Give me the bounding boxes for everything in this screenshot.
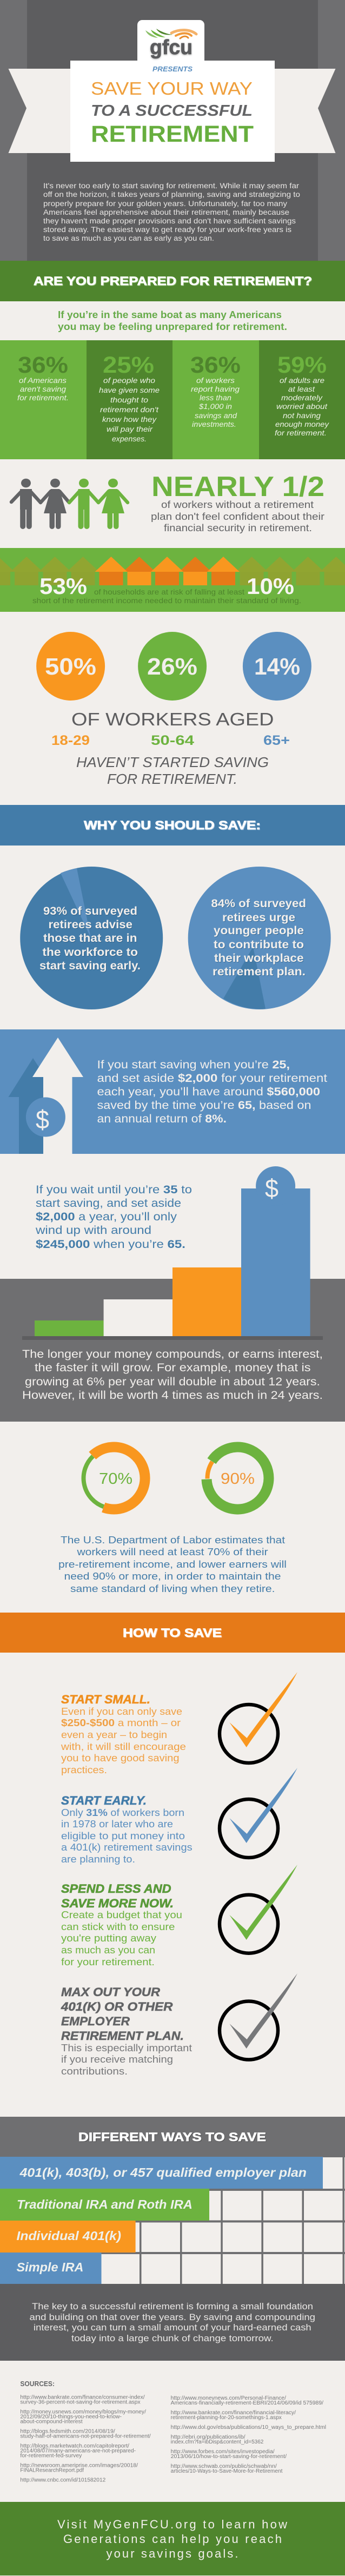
sources left column: http://money.usnews.com/money/blogs/my-money/ bbox=[20, 2409, 146, 2415]
chart: 84% pie: their workplace bbox=[214, 952, 304, 965]
title line 3: RETIREMENT bbox=[91, 121, 254, 147]
tip: max out: This is especially important bbox=[61, 2042, 192, 2053]
age labels bbox=[51, 733, 290, 748]
icon: gray check bbox=[220, 1973, 297, 2060]
stat text: 53% bbox=[39, 573, 87, 599]
age labels: 50-64 bbox=[151, 733, 194, 748]
sources left column: http://newsroom.ameriprise.com/images/20018/ bbox=[20, 2462, 138, 2468]
stat: 25% don't know: will pay their bbox=[107, 425, 153, 433]
savings text at 25: and set aside $2,000 for your retirement bbox=[97, 1072, 327, 1085]
panel: four statistics bbox=[0, 340, 345, 459]
stat: 36% under $1,000 bbox=[190, 352, 241, 428]
chart: 84% pie: retirement plan. bbox=[213, 966, 306, 978]
tip: max out: if you receive matching bbox=[61, 2053, 173, 2065]
tip: start small: you to have good saving bbox=[61, 1752, 180, 1763]
intro paragraph: stored away. The easiest way to get ready for your work-free years is bbox=[43, 225, 291, 234]
icon: green check bbox=[220, 1865, 297, 1953]
sources right column: http://www.bankrate.com/finance/financial-literacy/ bbox=[171, 2410, 296, 2416]
sources left column: 2014/08/07/many-americans-are-not-prepared- bbox=[20, 2448, 136, 2454]
panel: how to save heading bbox=[0, 1613, 345, 1653]
callout: nearly 1/2: financial security in retirement. bbox=[164, 522, 312, 533]
intro paragraph: properly prepare for your golden years. Unfortunately, far too many bbox=[43, 199, 287, 208]
closing paragraph: The key to a successful retirement is forming a small foundation bbox=[32, 2301, 313, 2311]
bar chart: plan types: Traditional IRA and Roth IRA bbox=[17, 2197, 193, 2211]
circle: 50% bbox=[36, 632, 105, 701]
icon: orange check bbox=[220, 1672, 297, 1763]
tip: spend less: as much as you can bbox=[61, 1944, 155, 1956]
title line 1: SAVE YOUR WAY bbox=[91, 78, 253, 98]
chart: 70% donut bbox=[84, 1447, 145, 1509]
stat: 36% under $1,000: savings and bbox=[195, 411, 237, 420]
savings text at 25: an annual return of 8%. bbox=[97, 1112, 227, 1125]
stat: 36% under $1,000: of workers bbox=[196, 376, 235, 385]
bar chart: plan types bbox=[0, 2157, 345, 2284]
stat: 59% worried: worried about bbox=[276, 402, 328, 411]
chart: 93% pie: the workforce to bbox=[42, 946, 138, 959]
stat: 59% worried: 59% bbox=[277, 352, 327, 378]
stat: 59% worried bbox=[275, 352, 329, 437]
stat: 36% not saving bbox=[17, 352, 69, 402]
panel: footer call to action: Generations can help you reach bbox=[63, 2532, 282, 2546]
tip: start early: eligible to put money into bbox=[61, 1830, 185, 1841]
chart: 93% pie: those that are in bbox=[43, 932, 137, 944]
stat: 36% under $1,000: $1,000 in bbox=[198, 402, 232, 411]
tip: start small: practices. bbox=[61, 1764, 107, 1775]
chart: 84% pie: retirees urge bbox=[222, 911, 295, 924]
workers aged label: OF WORKERS AGED bbox=[71, 709, 274, 729]
icon: rising arrows with dollar: $ bbox=[36, 1106, 49, 1134]
sources right column: articles/10-Ways-to-Save-More-for-Retirement bbox=[171, 2468, 283, 2474]
bar chart: plan types: 401(k), 403(b), or 457 qualified employer plan bbox=[19, 2165, 307, 2179]
stat: 36% not saving: 36% bbox=[18, 352, 68, 378]
title card bbox=[70, 61, 275, 162]
tip: start small: $250-$500 a month – or bbox=[61, 1717, 181, 1728]
tip: start small: Even if you can only save bbox=[61, 1706, 182, 1717]
tip: spend less: you're putting away bbox=[61, 1932, 157, 1944]
intro paragraph: off on the horizon, it takes years of planning, saving and strategizing to bbox=[43, 190, 300, 199]
tip: spend less: can stick with to ensure bbox=[61, 1921, 175, 1932]
callout: nearly 1/2 bbox=[151, 471, 324, 533]
intro paragraph: to save as much as you can as early as you can. bbox=[43, 234, 214, 242]
panel: how to save heading: HOW TO SAVE bbox=[123, 1626, 222, 1640]
stat: 59% worried: not having bbox=[283, 411, 321, 420]
stat: 36% not saving: of Americans bbox=[19, 376, 67, 385]
icon: green swoosh bbox=[145, 29, 172, 38]
sources left column: survey-36-percent-not-saving-for-retirement.aspx bbox=[20, 2399, 141, 2405]
sources left column: http://www.bankrate.com/finance/consumer-index/ bbox=[20, 2394, 145, 2400]
text: start at 35: $2,000 a year, you’ll only bbox=[36, 1210, 177, 1223]
chart: 90% donut bbox=[207, 1447, 269, 1509]
text: department of labor: pre-retirement income, and lower earners will bbox=[58, 1558, 287, 1570]
tip: start early: START EARLY. bbox=[61, 1794, 147, 1807]
tip: max out: contributions. bbox=[61, 2065, 128, 2077]
haven't started text: HAVEN’T STARTED SAVING bbox=[76, 754, 269, 770]
chart: 70% donut: 70% bbox=[99, 1470, 132, 1488]
stat: 59% worried: for retirement. bbox=[275, 428, 327, 437]
stat text bbox=[32, 573, 301, 605]
panel: header bbox=[0, 0, 345, 261]
text: start at 35: wind up with around bbox=[35, 1224, 151, 1237]
chart: 93% pie bbox=[20, 867, 163, 1009]
tip: spend less: for your retirement. bbox=[61, 1956, 155, 1967]
tip: start small bbox=[61, 1693, 186, 1775]
compounding text: However, it will be worth 4 times as much in 24 years. bbox=[22, 1389, 323, 1402]
sources left column: FINALResearchReport.pdf bbox=[20, 2467, 84, 2473]
panel: why you should save heading bbox=[0, 805, 345, 846]
tip: spend less: SAVE MORE NOW. bbox=[61, 1897, 174, 1910]
panel: footer call to action: your savings goals. bbox=[106, 2547, 238, 2560]
chart: 84% pie: to contribute to bbox=[214, 939, 304, 951]
sources right column: http://www.dol.gov/ebsa/publications/10_ways_to_prepare.html bbox=[171, 2425, 326, 2430]
stat: 25% don't know: retirement don't bbox=[100, 405, 159, 414]
intro paragraph: It's never too early to start saving for retirement. While it may seem far bbox=[43, 181, 299, 190]
subheading: same boat: If you’re in the same boat as many Americans bbox=[58, 309, 282, 320]
tip: max out: RETIREMENT PLAN. bbox=[61, 2029, 184, 2043]
sources bbox=[20, 2380, 326, 2483]
stat: 25% don't know: thought to bbox=[110, 395, 148, 404]
panel: different ways to save bbox=[0, 2117, 345, 2361]
tip: start small: even a year – to begin bbox=[61, 1729, 167, 1740]
compounding text bbox=[22, 1348, 323, 1402]
circle: 14%: 14% bbox=[254, 653, 300, 680]
tip: max out bbox=[61, 1985, 192, 2077]
age labels: 65+ bbox=[263, 733, 290, 748]
stat: 36% under $1,000: 36% bbox=[190, 352, 241, 378]
text: department of labor bbox=[58, 1534, 287, 1594]
sources left column: study-half-of-americans-not-prepared-for-retirement/ bbox=[20, 2433, 151, 2439]
sources heading: SOURCES: bbox=[20, 2380, 55, 2388]
panel: compounding bbox=[0, 1166, 345, 1422]
heading: DIFFERENT WAYS TO SAVE bbox=[78, 2130, 266, 2144]
compounding text: growing at 6% per year will double in about 12 years. bbox=[25, 1376, 320, 1388]
text: start at 35 bbox=[35, 1183, 192, 1251]
sources left column bbox=[20, 2394, 151, 2483]
stat: 25% don't know: 25% bbox=[103, 352, 154, 378]
stat: 59% worried: moderately bbox=[281, 393, 323, 402]
stat: 36% not saving: aren't saving bbox=[20, 385, 66, 393]
tip: max out: 401(K) OR OTHER bbox=[61, 2000, 173, 2013]
age labels: 18-29 bbox=[51, 733, 90, 748]
icon: row of olive houses bbox=[0, 557, 345, 585]
compounding text: The longer your money compounds, or earns interest, bbox=[22, 1348, 323, 1360]
stat: 36% under $1,000: investments. bbox=[192, 420, 236, 428]
sources left column: 2012/09/20/10-things-you-need-to-know- bbox=[20, 2414, 122, 2420]
tip: start early: in 1978 or later who are bbox=[61, 1818, 173, 1829]
tip: spend less: SPEND LESS AND bbox=[61, 1882, 171, 1895]
sources right column: Americans-financially-retirement-EBRI/2014/06/09/id 575989/ bbox=[171, 2400, 323, 2406]
stat: 25% don't know: of people who bbox=[103, 376, 155, 385]
sources left column: http://www.cnbc.com/id/101582012 bbox=[20, 2477, 106, 2483]
closing paragraph bbox=[29, 2301, 315, 2343]
callout: nearly 1/2: plan don't feel confident about their bbox=[151, 511, 324, 522]
intro paragraph: Americans feel apprehensive about their retirement, mainly because bbox=[43, 208, 289, 216]
savings text at 25 bbox=[97, 1058, 327, 1125]
savings text at 25: If you start saving when you’re 25, bbox=[97, 1058, 290, 1071]
circle: 14% bbox=[243, 632, 311, 701]
tip: start early bbox=[61, 1794, 193, 1865]
closing paragraph: interest, you can turn a small amount of your hard-earned cash bbox=[34, 2322, 311, 2333]
icon: orange swoosh bbox=[171, 30, 196, 38]
sources right column bbox=[171, 2395, 326, 2474]
subheading: same boat bbox=[58, 309, 287, 332]
stat: 59% worried: at least bbox=[288, 385, 315, 393]
intro paragraph bbox=[43, 181, 300, 242]
haven't started text: FOR RETIREMENT. bbox=[107, 771, 237, 787]
closing paragraph: and building on that over the years. By saving and compounding bbox=[29, 2312, 315, 2322]
stat text: 10% bbox=[247, 573, 294, 599]
chart: 84% pie bbox=[188, 867, 331, 1009]
tip: start early: a 401(k) retirement savings bbox=[61, 1841, 193, 1853]
stat: 25% don't know: expenses. bbox=[112, 434, 147, 443]
chart: circles by age group bbox=[36, 632, 311, 787]
chart: 90% donut: 90% bbox=[221, 1470, 255, 1488]
text: start at 35: If you wait until you’re 35 to bbox=[36, 1183, 192, 1196]
chart: 93% pie: start saving early. bbox=[39, 960, 141, 972]
tip: spend less: Create a budget that you bbox=[61, 1909, 182, 1920]
title line 2: TO A SUCCESSFUL bbox=[91, 102, 253, 120]
haven't started text bbox=[76, 754, 269, 787]
tip: start early: Only 31% of workers born bbox=[61, 1807, 184, 1818]
circle: 50%: 50% bbox=[45, 653, 96, 680]
chart: 93% pie: 93% of surveyed bbox=[43, 905, 137, 917]
text: department of labor: same standard of living when they retire. bbox=[70, 1583, 275, 1594]
text: department of labor: The U.S. Department of Labor estimates that bbox=[61, 1534, 286, 1545]
sources left column: http://blogs.fedsmith.com/2014/08/19/ bbox=[20, 2428, 115, 2434]
text: department of labor: need 90% or more, in order to maintain the bbox=[64, 1570, 281, 1582]
tip: start small: START SMALL. bbox=[61, 1693, 150, 1706]
text: start at 35: $245,000 when you’re 65. bbox=[36, 1238, 185, 1251]
chart: 84% pie: younger people bbox=[214, 924, 304, 937]
savings text at 25: each year, you’ll have around $560,000 bbox=[97, 1085, 320, 1098]
presents label: PRESENTS bbox=[152, 65, 193, 73]
sources right column: http://www.schwab.com/public/schwab/nn/ bbox=[171, 2463, 277, 2469]
stat text: of households are at risk of falling at least bbox=[94, 587, 244, 596]
circle: 26% bbox=[138, 632, 207, 701]
subheading: same boat: you may be feeling unprepared for retirement. bbox=[58, 321, 287, 332]
panel: why you should save heading: WHY YOU SHOULD SAVE: bbox=[84, 818, 261, 832]
compounding text: the faster it will grow. For example, money that is bbox=[35, 1362, 310, 1374]
stat: 25% don't know: know how they bbox=[102, 415, 157, 424]
savings text at 25: saved by the time you’re 65, based on bbox=[97, 1099, 311, 1112]
tip: max out: EMPLOYER bbox=[61, 2014, 130, 2028]
tip: max out: MAX OUT YOUR bbox=[61, 1985, 160, 1999]
sources right column: retirement-planning-for-20-somethings-1.aspx bbox=[171, 2415, 282, 2421]
sources right column: http://www.forbes.com/sites/investopedia/ bbox=[171, 2449, 275, 2455]
panel: are you prepared heading bbox=[0, 261, 345, 301]
stat: 36% under $1,000: less than bbox=[200, 393, 231, 402]
stat: 25% don't know bbox=[99, 352, 160, 443]
callout: nearly 1/2: of workers without a retirement bbox=[161, 499, 314, 510]
icon: four people holding hands bbox=[11, 479, 128, 529]
logo tab bbox=[137, 20, 204, 66]
intro paragraph: they haven't made proper provisions and don't have sufficient savings bbox=[43, 216, 296, 225]
panel: start at 25 bbox=[0, 1029, 345, 1154]
logo wordmark: gfcu bbox=[150, 36, 193, 59]
panel: households at risk bbox=[0, 548, 345, 612]
circle: 26%: 26% bbox=[147, 653, 197, 680]
bar chart: growth bbox=[22, 1166, 323, 1340]
tip: start small: with, it will still encourage bbox=[61, 1741, 186, 1752]
panel: are you prepared heading: ARE YOU PREPARED FOR RETIREMENT? bbox=[34, 274, 312, 288]
stat text: short of the retirement income needed to maintain their standard of living. bbox=[32, 596, 301, 605]
stat: 36% not saving: for retirement. bbox=[17, 393, 69, 402]
stat: 25% don't know: have given some bbox=[99, 386, 160, 394]
tip: start early: are planning to. bbox=[61, 1853, 135, 1865]
sources right column: index.cfm?fa=ibDisp&content_id=5362 bbox=[171, 2439, 264, 2445]
closing paragraph: today into a large chunk of change tomorrow. bbox=[71, 2333, 274, 2343]
icon: row of orange houses bbox=[95, 557, 240, 585]
sources right column: 2013/06/10/how-to-start-saving-for-retirement/ bbox=[171, 2454, 287, 2460]
sources left column: about-compound-interest bbox=[20, 2419, 83, 2425]
stat: 59% worried: of adults are bbox=[280, 376, 324, 385]
bar chart: plan types: Individual 401(k) bbox=[16, 2229, 121, 2243]
sources right column: http://www.moneynews.com/Personal-Finance/ bbox=[171, 2395, 286, 2401]
icon: rising arrows with dollar bbox=[9, 1038, 83, 1154]
chart: 84% pie: 84% of surveyed bbox=[211, 897, 306, 910]
bar chart: growth: $ bbox=[265, 1174, 278, 1203]
stat: 59% worried: enough money bbox=[275, 420, 329, 428]
text: start at 35: start saving, and set aside bbox=[36, 1197, 181, 1210]
bar chart: plan types: Simple IRA bbox=[16, 2260, 83, 2274]
banner ribbon bbox=[9, 69, 335, 153]
callout: nearly 1/2: NEARLY 1/2 bbox=[151, 471, 324, 503]
sources left column: http://blogs.marketwatch.com/capitolreport/ bbox=[20, 2443, 129, 2449]
icon: blue check bbox=[220, 1768, 297, 1858]
chart: 93% pie: retirees advise bbox=[49, 919, 132, 931]
panel: footer call to action bbox=[0, 2502, 345, 2575]
text: department of labor: workers will need at least 70% of their bbox=[76, 1546, 268, 1557]
sources right column: http://ebri.org/publications/ib/ bbox=[171, 2434, 246, 2440]
tip: spend less bbox=[61, 1882, 182, 1967]
stat: 36% under $1,000: report having bbox=[191, 385, 240, 393]
panel: footer call to action: Visit MyGenFCU.org to learn how bbox=[57, 2518, 287, 2531]
sources left column: for-retirement-fed-survey bbox=[20, 2453, 82, 2459]
